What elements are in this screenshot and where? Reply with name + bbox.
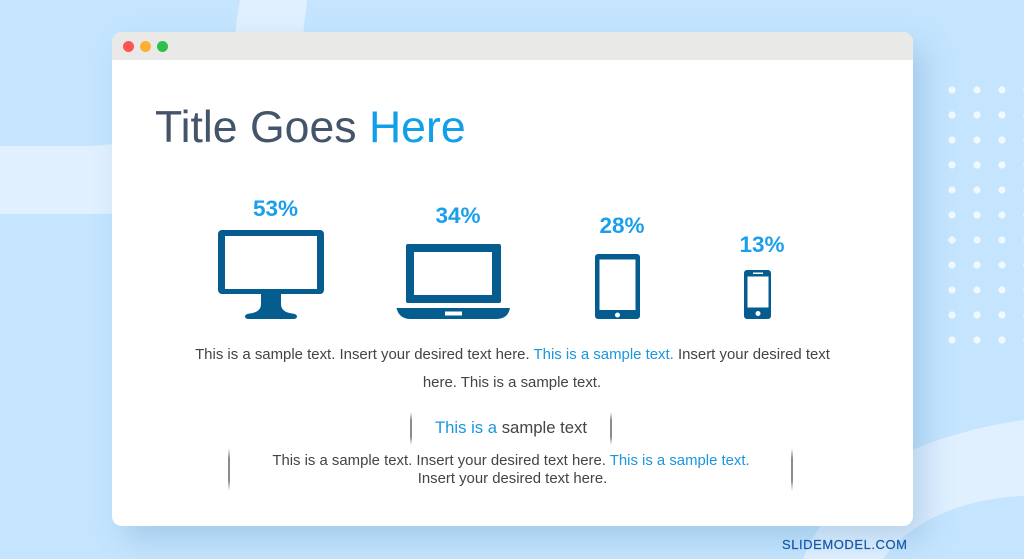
window button: green: [157, 40, 168, 52]
body text: This is a sample text. Insert your desired text here. This is a sample text. Insert your desired text: [195, 346, 831, 363]
caption text: [272, 453, 750, 487]
icon: smartphone: [744, 270, 771, 319]
title: Title Goes Here: [155, 103, 466, 152]
value: 13%: 13%: [739, 232, 785, 257]
window button: amber: [140, 40, 151, 52]
stat: tablet 28%: [595, 213, 645, 319]
panel: browser window: [112, 32, 913, 526]
value: 53%: 53%: [253, 196, 298, 221]
value: 28%: 28%: [599, 213, 645, 238]
body text: [195, 346, 831, 391]
bracket: subheading left: [410, 412, 412, 445]
stat: phone 13%: [739, 232, 785, 319]
icon: laptop: [396, 244, 510, 319]
body text: here. This is a sample text.: [423, 374, 601, 391]
window button: red: [123, 40, 134, 52]
caption text: This is a sample text. Insert your desired text here. This is a sample text.: [272, 453, 750, 469]
caption text: Insert your desired text here.: [418, 471, 607, 487]
window shadow: [112, 32, 913, 526]
stat: laptop 34%: [396, 203, 510, 319]
browser title bar: [112, 32, 913, 60]
icon: tablet: [595, 254, 640, 319]
icon: desktop monitor: [218, 230, 324, 319]
bracket: subheading right: [610, 412, 612, 445]
value: 34%: 34%: [435, 203, 481, 228]
brand: SLIDEMODEL.COM: SLIDEMODEL.COM: [782, 537, 907, 552]
subheading: This is a sample text: [435, 418, 587, 437]
bracket: caption right: [791, 448, 793, 491]
stat: desktop 53%: [218, 196, 324, 319]
bracket: caption left: [228, 448, 230, 491]
